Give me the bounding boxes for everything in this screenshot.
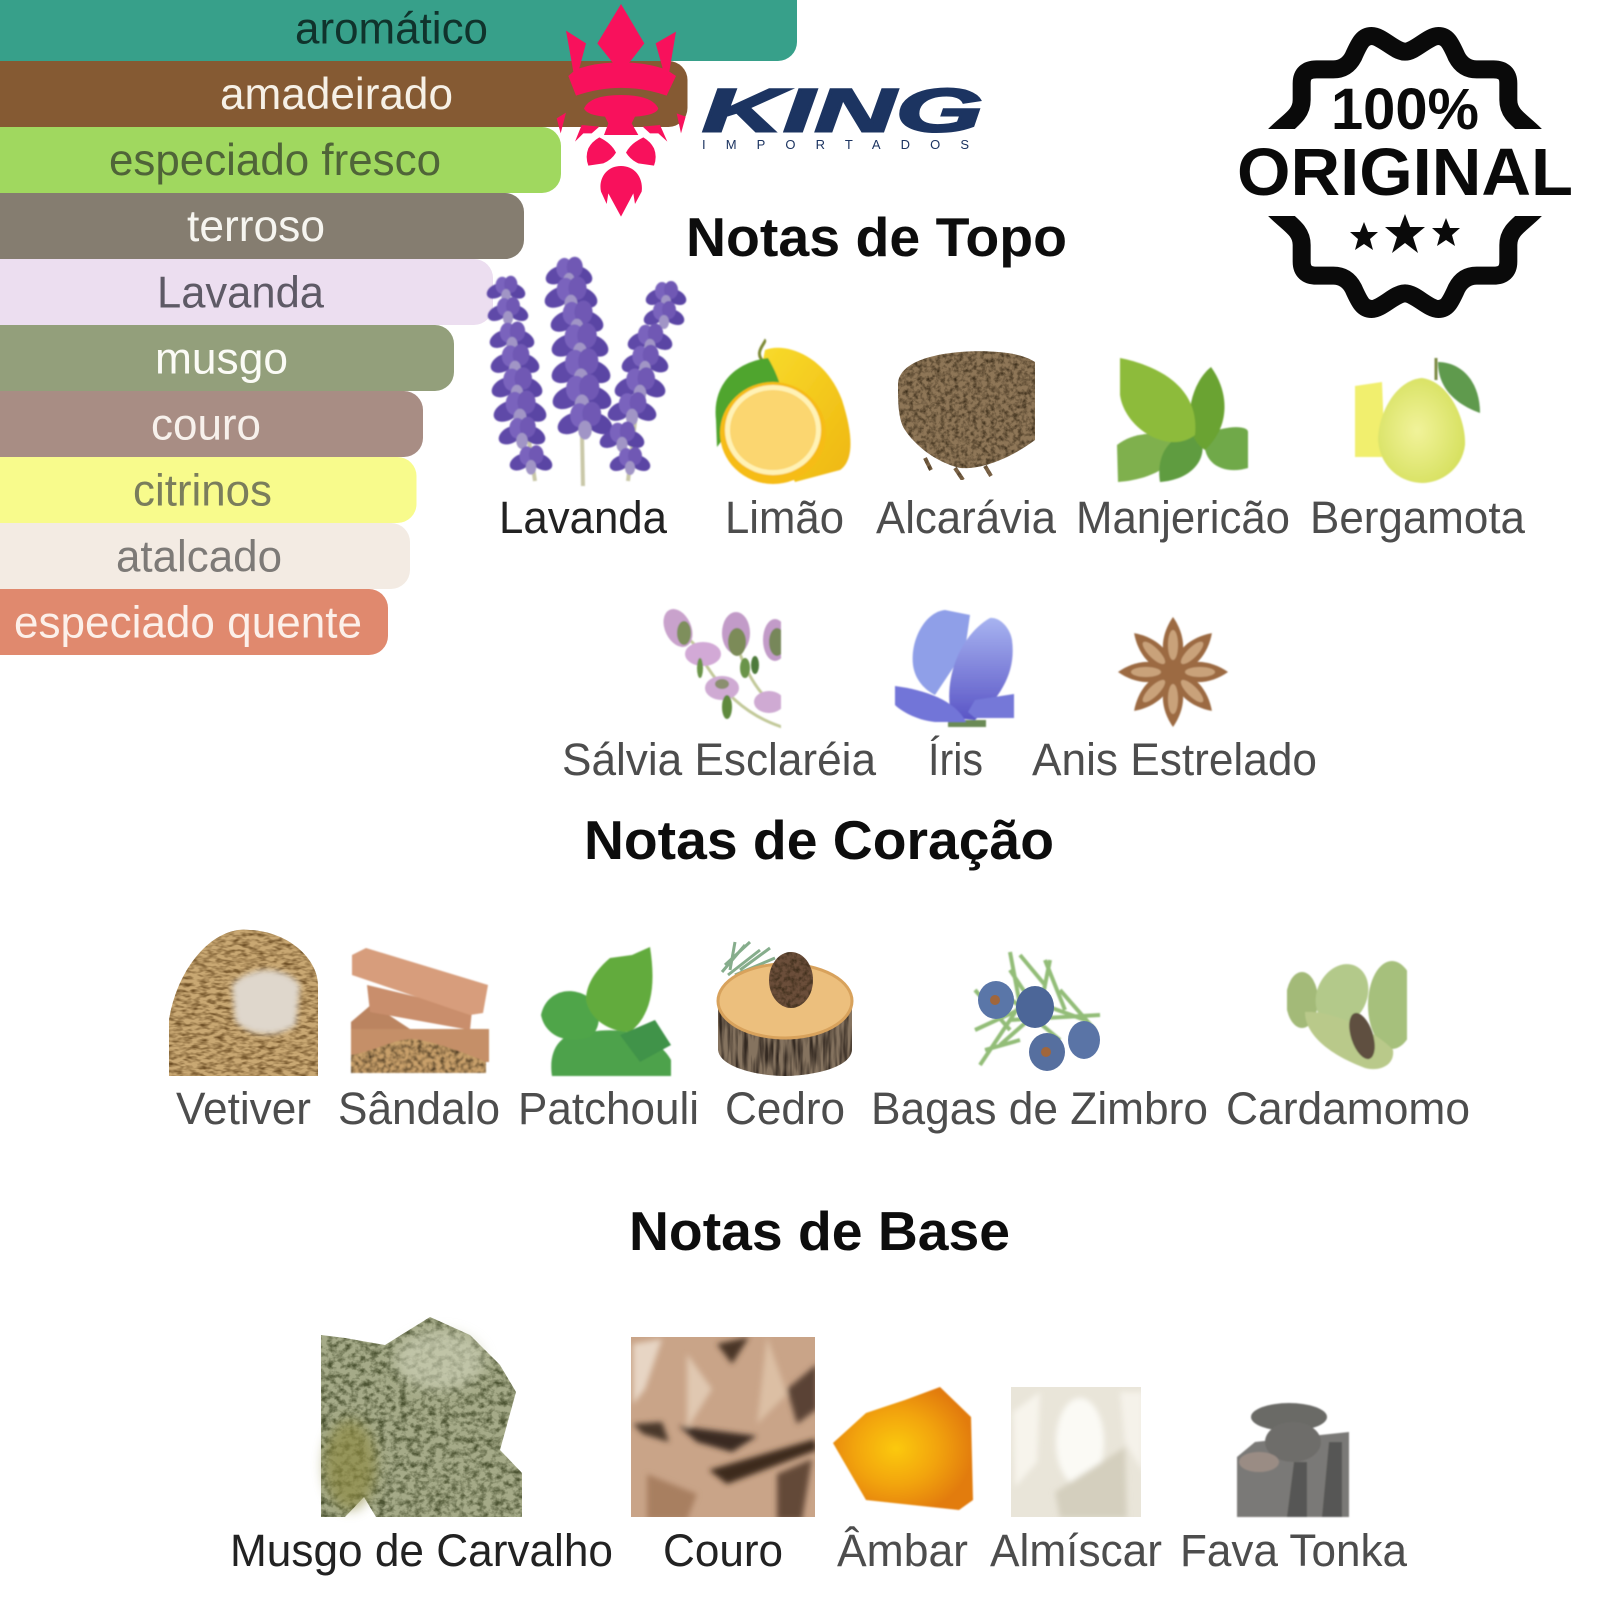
image: clary sage [658, 604, 787, 727]
label: Patchouli: Patchouli [518, 1083, 699, 1134]
image: musk [1011, 1387, 1143, 1518]
label: Íris: Íris [928, 734, 983, 785]
bar: couro: couro [151, 400, 261, 450]
label: Musgo de Carvalho: Musgo de Carvalho [230, 1525, 613, 1576]
label: Bagas de Zimbro: Bagas de Zimbro [871, 1083, 1208, 1134]
bar: especiado fresco [0, 127, 561, 193]
label: Cardamomo: Cardamomo [1226, 1083, 1470, 1134]
bar: amadeirado: amadeirado [220, 70, 453, 119]
image: cardamom [1286, 955, 1416, 1069]
bar: citrinos [0, 457, 416, 523]
image: tonka beans [1237, 1403, 1349, 1517]
bar: especiado quente: especiado quente [14, 598, 362, 648]
bar: terroso: terroso [187, 202, 325, 251]
logo: KING Importados wordmark: KING [702, 76, 983, 144]
bar: couro [0, 391, 423, 457]
bar: musgo: musgo [155, 334, 288, 384]
bar: aromático: aromático [295, 4, 488, 54]
bar: terroso [0, 193, 524, 259]
badge: ORIGINAL: ORIGINAL [1237, 135, 1573, 210]
heading: Notas de Coração: Notas de Coração [584, 809, 1054, 871]
image: iris [895, 610, 1014, 727]
badge: stars [1350, 214, 1460, 253]
heading: Notas de Topo: Notas de Topo [686, 206, 1067, 268]
image: cedar stump with pine cone [718, 942, 852, 1076]
label: Vetiver: Vetiver [176, 1083, 311, 1134]
image: leather [631, 1337, 817, 1520]
label: Fava Tonka: Fava Tonka [1180, 1525, 1408, 1576]
logo: crown emblem [557, 4, 686, 217]
bar: atalcado [0, 523, 410, 589]
image: juniper berries [975, 952, 1100, 1071]
label: Manjericão: Manjericão [1076, 492, 1290, 543]
image: sandalwood [351, 948, 489, 1073]
bar: aromático [0, 0, 797, 61]
image: lavender [484, 257, 689, 486]
image: star anise [1118, 617, 1228, 727]
label: Anis Estrelado: Anis Estrelado [1032, 734, 1317, 785]
label: Almíscar: Almíscar [990, 1525, 1162, 1576]
label: Bergamota: Bergamota [1310, 492, 1526, 543]
bar: amadeirado [0, 61, 688, 127]
label: Alcarávia: Alcarávia [876, 492, 1057, 543]
label: Âmbar: Âmbar [837, 1525, 968, 1576]
label: Lavanda: Lavanda [499, 492, 668, 543]
badge: 100%: 100% [1331, 77, 1479, 142]
bar: Lavanda: Lavanda [157, 268, 324, 318]
heading: Notas de Base: Notas de Base [629, 1200, 1010, 1262]
image: amber [833, 1387, 973, 1510]
bar: citrinos: citrinos [133, 466, 272, 516]
image: bergamot [1355, 358, 1480, 483]
image: vetiver [169, 930, 318, 1076]
bar: atalcado: atalcado [116, 532, 282, 582]
image: basil [1117, 358, 1248, 482]
logo: KING Importados wordmark: IMPORTADOS [702, 137, 969, 152]
image: caraway seeds [898, 351, 1035, 480]
label: Sálvia Esclaréia: Sálvia Esclaréia [562, 734, 877, 785]
legend: accord bars [0, 0, 797, 655]
label: Limão: Limão [725, 492, 844, 543]
logo: KING Importados wordmark [702, 76, 983, 152]
bar: musgo [0, 325, 454, 391]
label: Couro: Couro [663, 1525, 783, 1576]
bar: especiado fresco: especiado fresco [109, 136, 441, 185]
bar: especiado quente [0, 589, 388, 655]
badge: 100% original [1237, 36, 1573, 309]
image: patchouli [541, 947, 671, 1076]
bar: Lavanda [0, 259, 493, 325]
label: Cedro: Cedro [725, 1083, 845, 1134]
label: Sândalo: Sândalo [338, 1083, 500, 1134]
image: oakmoss [321, 1317, 522, 1517]
badge: wavy seal outline [1272, 36, 1538, 309]
image: lemon [716, 340, 850, 484]
